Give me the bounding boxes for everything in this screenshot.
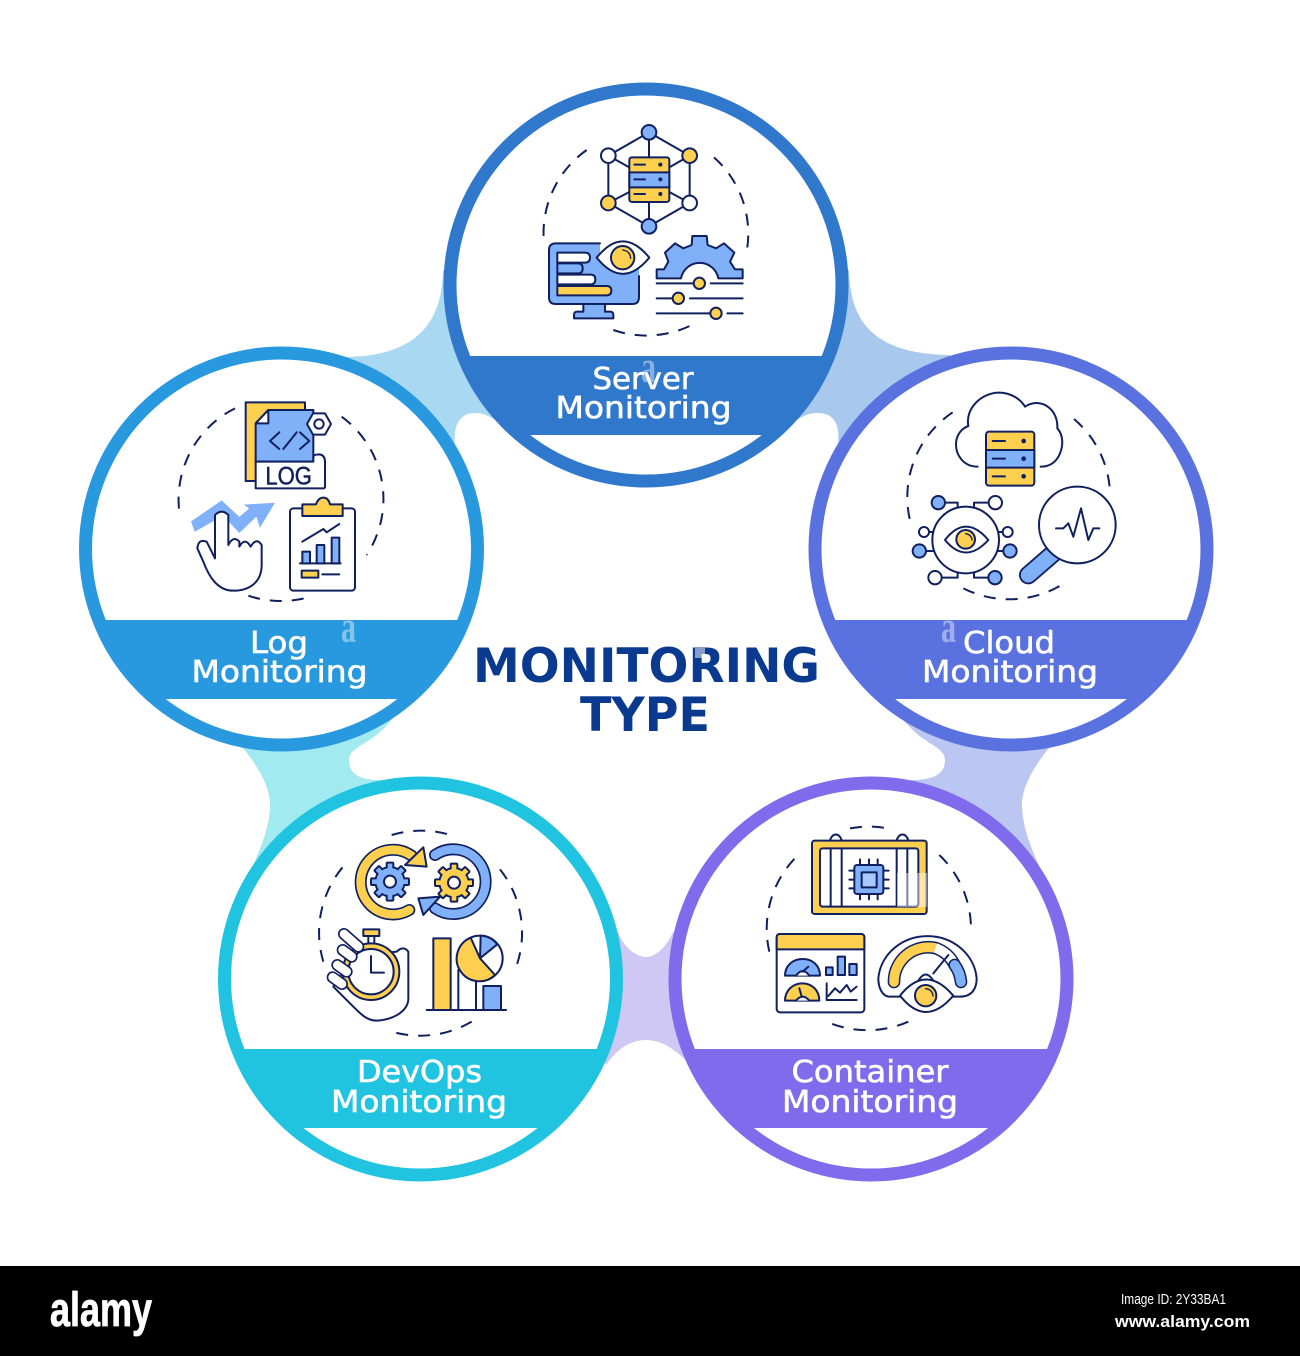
label: devops monitoring: Monitoring	[331, 1085, 507, 1120]
label band: log	[106, 620, 458, 699]
website: www.alamy.com	[1114, 1312, 1250, 1331]
label: cloud monitoring: Monitoring	[922, 655, 1098, 690]
label: cloud monitoring: Cloud	[963, 626, 1055, 661]
panel: server monitoring	[440, 89, 852, 481]
label: log monitoring: Monitoring	[192, 655, 368, 690]
connector: log to devops	[238, 680, 420, 868]
watermark marks: a	[641, 341, 656, 392]
icon: devops loops, stopwatch in hand, charts	[319, 831, 522, 1036]
connector: server to cloud	[772, 270, 1000, 445]
label band: cloud	[835, 620, 1187, 699]
panel: container monitoring	[665, 783, 1077, 1175]
label: server monitoring: Monitoring	[556, 391, 732, 426]
icon: cloud server, eye hub, magnifier	[907, 393, 1116, 599]
ring: cloud	[815, 353, 1207, 745]
icon: server network, monitor with eye, gear with sliders	[544, 125, 748, 336]
label: container monitoring: Monitoring	[782, 1085, 958, 1120]
panel: devops monitoring	[215, 783, 627, 1175]
ring: container	[675, 783, 1067, 1175]
title: monitoring type: TYPE	[580, 688, 710, 743]
label band: container	[695, 1049, 1047, 1128]
icon: log file, hand with arrow, clipboard chart: LOG	[265, 462, 312, 490]
ring: server	[450, 89, 842, 481]
connector: server to log	[300, 270, 520, 445]
panel: cloud monitoring	[805, 353, 1217, 745]
image id: Image ID: 2Y33BA1	[1121, 1291, 1226, 1308]
connector: devops to container	[580, 932, 720, 1065]
label: devops monitoring: DevOps	[357, 1055, 482, 1090]
icon: log file, hand with arrow, clipboard chart	[179, 402, 383, 601]
label band: server	[470, 356, 822, 435]
label: container monitoring: Container	[792, 1055, 949, 1090]
watermark marks	[341, 341, 956, 907]
footer: alamy band	[0, 1266, 1300, 1356]
label: log monitoring: Log	[250, 626, 308, 661]
title: monitoring type: MONITORING	[473, 639, 820, 694]
label band: devops	[244, 1049, 596, 1128]
ring: devops	[224, 783, 616, 1175]
label: server monitoring: Server	[592, 362, 694, 397]
ring: log	[86, 353, 478, 745]
panel: log monitoring	[76, 353, 488, 745]
watermark marks: a	[341, 601, 356, 652]
connector: cloud to container	[870, 680, 1054, 868]
icon: container chip, dashboard, speedometer with eye	[767, 827, 977, 1030]
logo: alamy: alamy	[50, 1284, 152, 1337]
watermark marks: a	[941, 601, 956, 652]
